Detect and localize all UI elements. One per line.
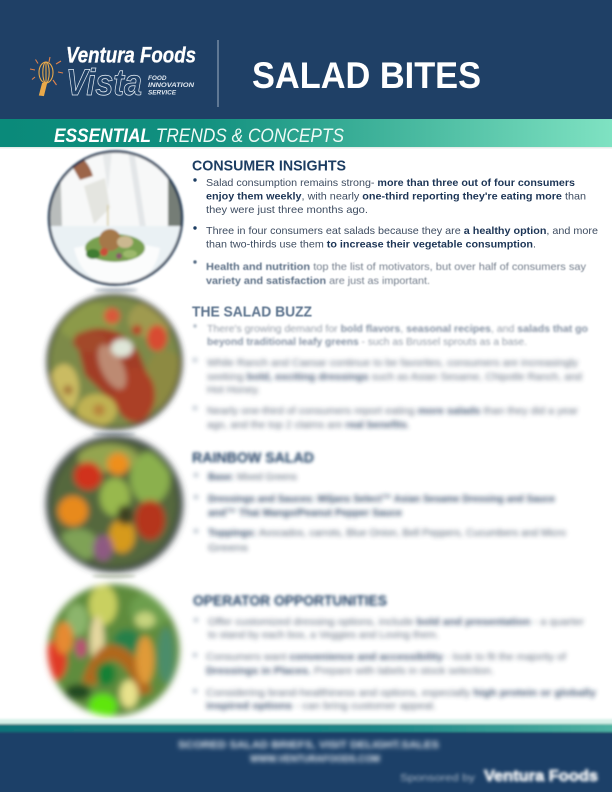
- bullet: demand: [193, 323, 588, 348]
- bullet: dressings: seeking bold, exciting dressings such as Asian Sesame, Chipotle Ranch, and: [207, 371, 582, 383]
- title: SALAD BITES: [252, 55, 481, 96]
- sponsor logo: Ventura Foods: [484, 768, 598, 785]
- footer text: [178, 740, 439, 765]
- panel: the salad buzz: [44, 292, 588, 434]
- bullet: convenience: Dressings in Places. Prepare with labels in stock selection.: [206, 665, 494, 677]
- banner text: ESSENTIAL TRENDS & CONCEPTS: [54, 126, 344, 147]
- footer band: [0, 719, 612, 792]
- bullet group: enjoy them weekly , with nearly one-third reporting they're eating more than: [206, 190, 586, 202]
- photo: dressing poured on salad: [45, 150, 186, 290]
- bullet group: than two-thirds use them to increase their vegetable consumption .: [206, 238, 536, 250]
- bullet group: they were just three months ago.: [206, 204, 368, 216]
- bullet: motivators: [193, 260, 587, 287]
- bullet: motivators: Health and nutrition top the list of motivators, but over half of consumers say: [206, 261, 587, 273]
- logo: Ventura Foods Vista: [30, 42, 196, 103]
- footer text: SCORED SALAD BRIEFS, VISIT DELIGHT.SALES: [178, 740, 439, 751]
- bullet: healthy: Considering brand-healthiness and options, especially high protein or globally: [206, 687, 596, 699]
- recipe list: and™ Thai Mango/Peanut Pepper Sauce: [208, 507, 402, 519]
- bullet: customizable: to stand by each box, a Veggies and Loving them.: [208, 629, 439, 641]
- heading: OPERATOR OPPORTUNITIES: [193, 592, 387, 610]
- sponsor label: Sponsored by: [400, 773, 475, 784]
- photo shadow: [92, 432, 136, 436]
- recipe list: [194, 471, 566, 554]
- bullet: convenience: Consumers want convenience and accessibility - look to fit the majority of: [206, 651, 566, 663]
- bullet: motivators: variety and satisfaction are just as important.: [206, 275, 430, 287]
- bullet: growth: Nearly one-third of consumers report eating more salads than they did a year: [207, 405, 579, 417]
- bullet: healthy: inspired options - can bring customer appeal.: [206, 700, 436, 712]
- logo tagline: [148, 75, 194, 96]
- recipe list: Greens: [208, 542, 248, 554]
- recipe list: Toppings: Avocados, carrots, Blue Onion, Bell Peppers, Cucumbers and Micro: [208, 527, 566, 539]
- recipe list: Dressings and Sauces: Miljans Select™ Asian Sesame Dressing and Sauce: [208, 493, 555, 505]
- section banner: [0, 119, 612, 148]
- bullet: customizable: [194, 616, 585, 641]
- bullet: demand: beyond traditional leafy greens - such as Brussel sprouts as a base.: [207, 336, 527, 348]
- bullet: dressings: [193, 357, 582, 396]
- header band: [0, 0, 612, 119]
- bullet group: [193, 177, 598, 250]
- photo shadow: [92, 574, 136, 578]
- photo: chicken and avocado salad: [44, 292, 186, 434]
- photo: rainbow salad: [44, 434, 186, 576]
- bullet: customizable: Offer customized dressing options, include bold and presentation - a quarter: [208, 616, 585, 628]
- bullet: growth: [193, 405, 579, 431]
- logo tagline: INNOVATION: [148, 82, 194, 89]
- photo: salad with vegetables: [44, 582, 186, 722]
- photo shadow: [94, 288, 138, 292]
- bullet: dressings: Hot Honey.: [207, 384, 260, 396]
- recipe list: Base: Mixed Greens: [208, 471, 297, 483]
- panel: consumer insights: [45, 150, 598, 290]
- bullet group: Three in four consumers eat salads because they are a healthy option, and more: [206, 225, 598, 237]
- Vista outlined wordmark: Vista: [66, 62, 142, 103]
- panel: operator opportunities: [44, 582, 596, 722]
- heading: RAINBOW SALAD: [192, 450, 314, 466]
- logo tagline: SERVICE: [148, 90, 177, 96]
- footer text: WWW.VENTURAFOODS.COM: [250, 754, 380, 765]
- bullet: demand: There's growing demand for bold flavors, seasonal recipes, and salads that go: [207, 323, 588, 335]
- panel: rainbow salad: [44, 434, 566, 576]
- heading: CONSUMER INSIGHTS: [192, 158, 346, 174]
- heading: THE SALAD BUZZ: [192, 304, 312, 320]
- bullet: dressings: While Ranch and Caesar continue to be favorites, consumers are increasingly: [207, 357, 579, 369]
- logo divider: [218, 40, 219, 107]
- bullet: growth: ago, and the top 2 claims are real benefits.: [207, 419, 410, 431]
- Ventura Foods wordmark: Ventura Foods: [66, 42, 196, 68]
- icon: whisk: [30, 57, 63, 96]
- logo tagline: FOOD: [148, 75, 167, 82]
- bullet: healthy: [193, 687, 596, 712]
- bullet group: Salad consumption remains strong- more than three out of four consumers: [206, 177, 575, 189]
- bullet: convenience: [193, 651, 566, 677]
